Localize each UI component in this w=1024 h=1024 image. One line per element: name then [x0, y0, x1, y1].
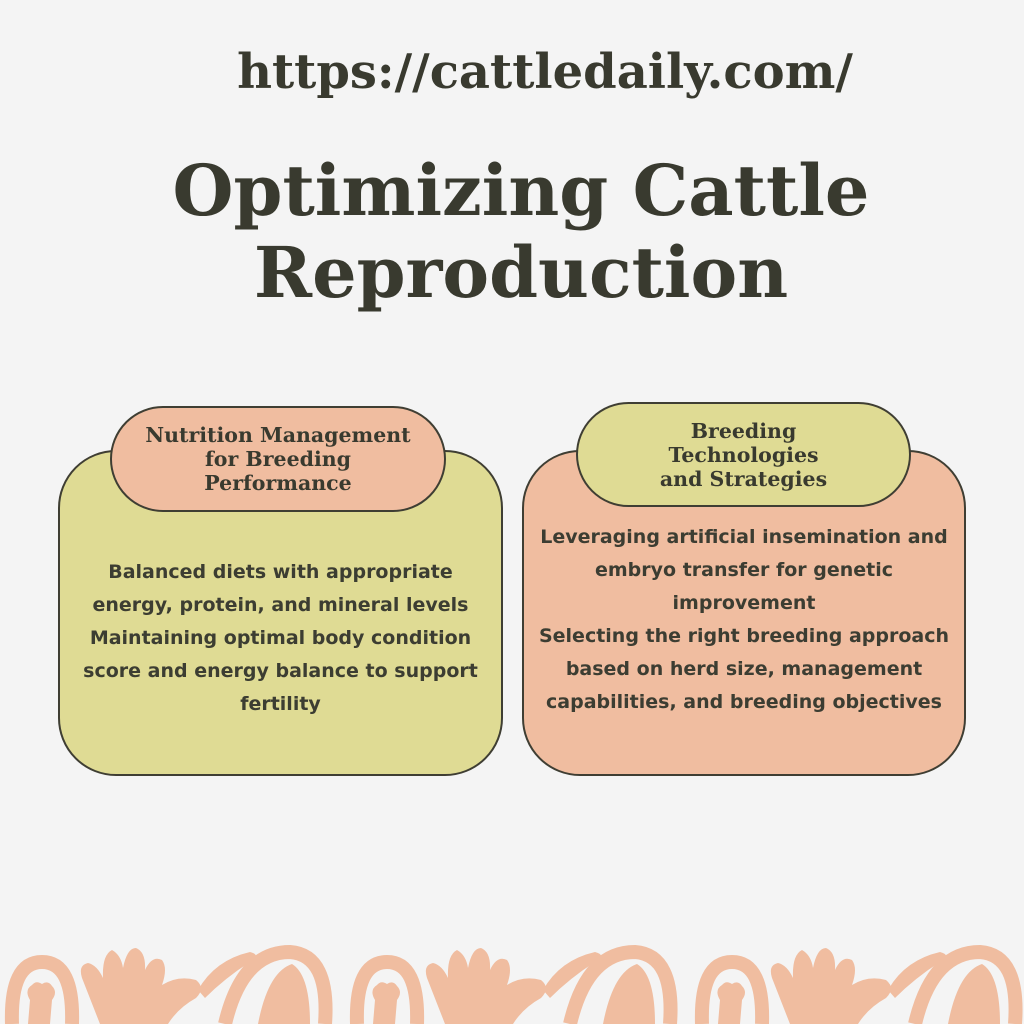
pill: nutrition heading: Performance: [204, 471, 352, 495]
pill: nutrition heading: Nutrition Management: [145, 423, 411, 447]
text: nutrition body: fertility: [240, 693, 321, 715]
text: breeding body: improvement: [673, 592, 815, 614]
pill: nutrition heading: for Breeding: [205, 447, 351, 471]
panel: breeding: [522, 450, 966, 776]
text: nutrition body: [83, 561, 478, 715]
pill: breeding heading: Technologies: [668, 442, 819, 466]
text: nutrition body: Maintaining optimal body condition: [90, 627, 471, 649]
title: [173, 149, 869, 314]
url heading: https://cattledaily.com/: [237, 44, 853, 100]
pill: breeding heading: Breeding: [691, 418, 796, 442]
decorative bottom border: [4, 945, 1022, 1024]
text: breeding body: capabilities, and breeding objectives: [546, 691, 942, 713]
pill: nutrition heading: [110, 406, 446, 512]
text: nutrition body: energy, protein, and mineral levels: [92, 594, 468, 616]
text: breeding body: Selecting the right breeding approach: [539, 625, 949, 647]
text: breeding body: Leveraging artificial insemination and: [540, 526, 948, 548]
pill: breeding heading: [576, 402, 911, 507]
title: Reproduction: [254, 231, 788, 314]
pill: breeding heading: and Strategies: [660, 466, 827, 490]
text: nutrition body: Balanced diets with appropriate: [108, 561, 453, 583]
text: breeding body: based on herd size, management: [566, 658, 922, 680]
title: Optimizing Cattle: [173, 149, 869, 232]
text: breeding body: [539, 526, 949, 713]
panel: nutrition: [58, 450, 503, 776]
text: breeding body: embryo transfer for genetic: [595, 559, 893, 581]
text: nutrition body: score and energy balance to support: [83, 660, 478, 682]
